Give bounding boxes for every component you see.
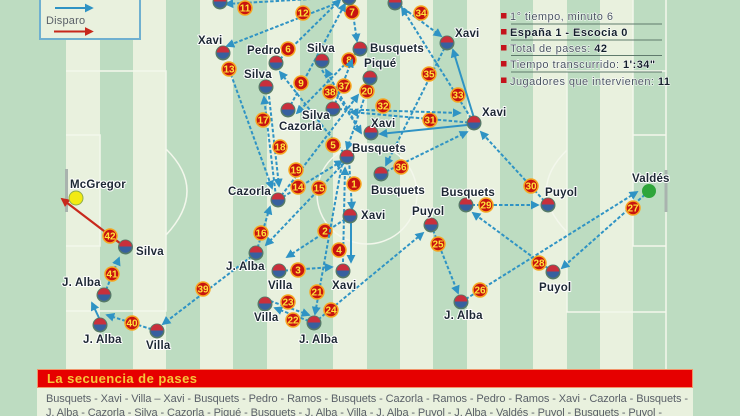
player: J. Alba — [83, 318, 122, 346]
player: Villa: Villa — [254, 312, 279, 324]
pass 32 — [333, 99, 460, 113]
player: Xavi — [342, 208, 385, 224]
pass 24: 24 — [325, 306, 337, 316]
pass 23 — [265, 295, 309, 315]
sequence heading: La secuencia de pases — [47, 371, 197, 386]
pass 11 — [226, 0, 345, 15]
sequence text — [46, 393, 688, 416]
pass 7 — [345, 0, 359, 41]
player: J. Alba — [226, 246, 265, 273]
player: J. Alba: J. Alba — [83, 334, 122, 346]
pass 15 — [266, 163, 344, 245]
player: Puyol: Puyol — [545, 187, 577, 199]
player: Puyol: Puyol — [539, 282, 571, 294]
pass 36: 36 — [395, 162, 407, 174]
player: J. Alba: J. Alba — [62, 277, 101, 289]
pass 25: 25 — [432, 240, 444, 250]
pass 30 — [481, 132, 548, 205]
pass 6: 6 — [285, 44, 291, 56]
player: Piqué — [362, 58, 396, 86]
match info: Total de pases: 42 — [510, 43, 607, 55]
player: Villa: Villa — [146, 340, 171, 352]
solid run arrows — [92, 50, 474, 320]
pass 17: 17 — [257, 116, 269, 126]
pass 25 — [431, 225, 458, 293]
pass 27 — [562, 191, 649, 268]
player: Busquets: Busquets — [370, 43, 424, 55]
pass 14: 14 — [292, 182, 304, 194]
player: Xavi: Xavi — [361, 210, 385, 222]
pass 33: 33 — [452, 90, 464, 102]
match info: 1° tiempo, minuto 6 — [510, 11, 613, 23]
pass 26 — [461, 192, 637, 302]
pass 35 — [386, 43, 447, 165]
pass 23: 23 — [282, 298, 294, 308]
match info: España 1 - Escocia 0 — [510, 27, 628, 39]
pass 39 — [163, 253, 256, 324]
goalkeeper: McGregor — [69, 179, 126, 205]
pass 24 — [314, 233, 423, 323]
pass 27: 27 — [627, 204, 639, 214]
player: Villa — [146, 324, 171, 352]
pass 34 — [395, 2, 441, 36]
pass 31: 31 — [424, 116, 436, 126]
player: top right — [388, 0, 402, 10]
pass 38 — [322, 70, 361, 133]
pass 38: 38 — [324, 88, 336, 98]
pass 28 — [473, 213, 553, 272]
pass 5 — [280, 72, 347, 157]
pass 9: 9 — [298, 78, 304, 90]
pass 21: 21 — [311, 288, 323, 298]
player: Silva: Silva — [302, 110, 330, 122]
player: Puyol — [539, 264, 571, 294]
pass 28: 28 — [533, 258, 545, 270]
pass 18 — [269, 96, 287, 186]
player: Villa — [254, 296, 279, 324]
match info — [501, 11, 670, 88]
match info: Jugadores que intervienen: 11 — [510, 76, 670, 88]
player: Cazorla: Cazorla — [279, 121, 322, 133]
pass 4 — [332, 168, 346, 262]
player: Silva — [307, 43, 335, 68]
pass 3: 3 — [295, 266, 301, 276]
pass 7: 7 — [349, 8, 355, 18]
player: J. Alba — [62, 277, 112, 302]
player: Silva: Silva — [244, 69, 272, 81]
pass 19: 19 — [290, 166, 302, 176]
pass 16 — [254, 207, 270, 253]
player: Pedro: Pedro — [247, 45, 281, 57]
pass 29: 29 — [480, 200, 492, 212]
pass 41: 41 — [106, 270, 118, 280]
pass 8 — [297, 49, 360, 113]
player: top left — [212, 0, 228, 10]
player: Xavi — [364, 118, 395, 140]
pass 15: 15 — [313, 184, 325, 194]
player: Busquets — [441, 187, 495, 212]
pass 26: 26 — [474, 286, 486, 296]
player: Piqué: Piqué — [364, 58, 396, 70]
pass 40: 40 — [126, 318, 138, 330]
player: Xavi: Xavi — [455, 28, 479, 40]
pass 17 — [256, 97, 276, 197]
player: Xavi — [332, 264, 356, 292]
player: Villa — [268, 264, 293, 292]
pass 2 — [287, 216, 350, 257]
pass 37 — [333, 60, 352, 109]
player: Silva: Silva — [136, 246, 164, 258]
player: Xavi — [198, 35, 230, 60]
player: Puyol — [540, 187, 577, 212]
pass 9 — [288, 4, 345, 110]
pass 29 — [466, 198, 538, 212]
pass 1: 1 — [351, 180, 357, 190]
pass 18: 18 — [274, 142, 286, 154]
player: Cazorla: Cazorla — [228, 186, 271, 198]
pass 6 — [276, 0, 340, 63]
goalkeeper: Valdés: Valdés — [632, 173, 670, 185]
pass 3 — [279, 263, 332, 277]
player: Busquets — [352, 42, 424, 56]
player: Pedro — [247, 45, 284, 70]
pass 41 — [104, 258, 119, 295]
player: Villa: Villa — [268, 280, 293, 292]
player: Xavi — [440, 28, 479, 50]
pass 32: 32 — [377, 102, 389, 112]
player: Xavi: Xavi — [482, 107, 506, 119]
player: Xavi — [466, 107, 506, 130]
pass 21 — [310, 164, 342, 314]
player: Puyol: Puyol — [412, 206, 444, 218]
pass 2: 2 — [322, 226, 328, 238]
pass 22 — [275, 308, 314, 327]
pass 5: 5 — [330, 140, 336, 152]
player: Silva: Silva — [307, 43, 335, 55]
pass 11: 11 — [240, 4, 251, 14]
player: Busquets: Busquets — [441, 187, 495, 199]
pass 8: 8 — [346, 56, 352, 66]
player: Silva — [244, 69, 274, 94]
player: J. Alba: J. Alba — [299, 334, 338, 346]
pass 13 — [222, 62, 272, 188]
player: top centre — [342, 0, 356, 6]
player: J. Alba — [299, 316, 338, 346]
shot arrow 42: 42 — [104, 232, 116, 242]
player: Puyol — [412, 206, 444, 232]
pass 14 — [278, 161, 342, 200]
player: Xavi: Xavi — [332, 280, 356, 292]
pass 16: 16 — [255, 228, 267, 240]
pass 34: 34 — [415, 8, 427, 20]
player: J. Alba — [444, 294, 483, 322]
legend: Disparo — [46, 15, 85, 27]
pass 30: 30 — [525, 182, 537, 192]
pass 12 — [227, 2, 340, 46]
pass 39: 39 — [197, 284, 209, 296]
player: Busquets: Busquets — [371, 185, 425, 197]
goalkeeper: Valdés — [632, 173, 670, 198]
player: Busquets: Busquets — [352, 143, 406, 155]
pass 20 — [347, 84, 374, 149]
pass 13: 13 — [223, 64, 235, 76]
sequence panel — [37, 370, 693, 416]
match info: Tiempo transcurrido: 1':34" — [510, 59, 656, 71]
pass 35: 35 — [423, 70, 435, 80]
player: Silva — [118, 240, 164, 258]
player: Xavi: Xavi — [198, 35, 222, 47]
sequence heading — [38, 370, 692, 388]
pass 22: 22 — [287, 316, 299, 326]
pass 12: 12 — [297, 8, 309, 20]
player: Busquets — [371, 166, 425, 197]
pass 33 — [402, 8, 474, 123]
pass 4: 4 — [336, 246, 342, 256]
shot arrow 42 — [62, 199, 125, 247]
pass 37: 37 — [338, 82, 350, 92]
player: Cazorla — [279, 102, 322, 133]
goalkeeper: McGregor: McGregor — [70, 179, 126, 191]
legend — [40, 0, 140, 39]
sequence text: Busquets - Xavi - Villa – Xavi - Busquets - Pedro - Ramos - Busquets - Cazorla - Ramos - Pedro - Ramos - Xavi - Cazorla - Busquets - — [46, 393, 688, 405]
player: Silva — [302, 102, 340, 122]
pass 20: 20 — [361, 86, 373, 98]
pass 36 — [381, 132, 467, 174]
player: Cazorla — [228, 186, 286, 208]
player: J. Alba: J. Alba — [226, 261, 265, 273]
player: Busquets — [340, 143, 406, 164]
pass 1 — [347, 160, 361, 209]
pass 40 — [107, 315, 157, 331]
pass 19 — [278, 95, 358, 200]
player: Xavi: Xavi — [371, 118, 395, 130]
pass 31 — [351, 112, 474, 127]
player: J. Alba: J. Alba — [444, 310, 483, 322]
